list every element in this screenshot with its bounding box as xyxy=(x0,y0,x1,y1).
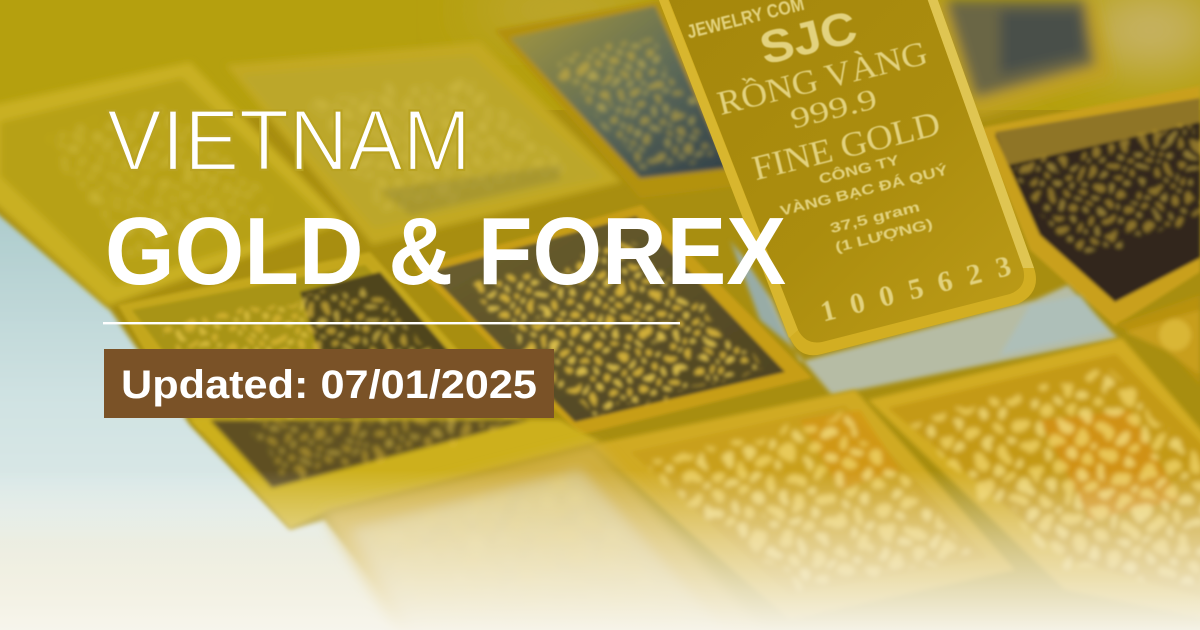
date badge: Updated: 07/01/2025 xyxy=(121,363,537,407)
divider line xyxy=(103,322,680,324)
title line: VIETNAM: VIETNAM xyxy=(107,93,471,189)
bar engraving text: 1005623 xyxy=(817,250,1014,328)
bar: top centre xyxy=(226,42,622,245)
bar: centre dark xyxy=(415,205,812,435)
bar: bottom right xyxy=(868,338,1200,620)
bar engraving text xyxy=(685,0,1014,328)
bar engraving text: (1 LƯỢNG) xyxy=(833,215,934,255)
bar: top left xyxy=(0,62,345,306)
bar engraving text: RỒNG VÀNG xyxy=(713,33,931,123)
table reflection around main bar xyxy=(730,240,1118,395)
bar engraving text: CÔNG TY xyxy=(817,150,901,187)
main SJC gold bar xyxy=(657,0,1036,355)
bar: lower left xyxy=(188,418,600,528)
bar: bottom left xyxy=(322,442,780,630)
bar: top right dark xyxy=(930,0,1112,118)
pale table surface xyxy=(0,190,430,630)
soft white fade at bottom xyxy=(0,470,1200,630)
bar engraving text: 37,5 gram xyxy=(828,198,921,236)
bar: bottom centre xyxy=(590,390,1015,620)
bar: right lower xyxy=(1115,295,1200,385)
bar engraving text: VÀNG BẠC ĐÁ QUÝ xyxy=(778,160,950,219)
bar: right dark xyxy=(980,86,1200,326)
bar: top middle dark xyxy=(495,0,745,198)
title line: GOLD & FOREX: GOLD & FOREX xyxy=(105,198,786,305)
title xyxy=(105,93,786,305)
bar engraving text: FINE GOLD xyxy=(748,104,944,188)
date badge xyxy=(104,349,554,418)
bar engraving text: SJC xyxy=(754,0,862,75)
bar: middle left xyxy=(118,252,525,430)
bar engraving text: 999.9 xyxy=(787,83,880,135)
